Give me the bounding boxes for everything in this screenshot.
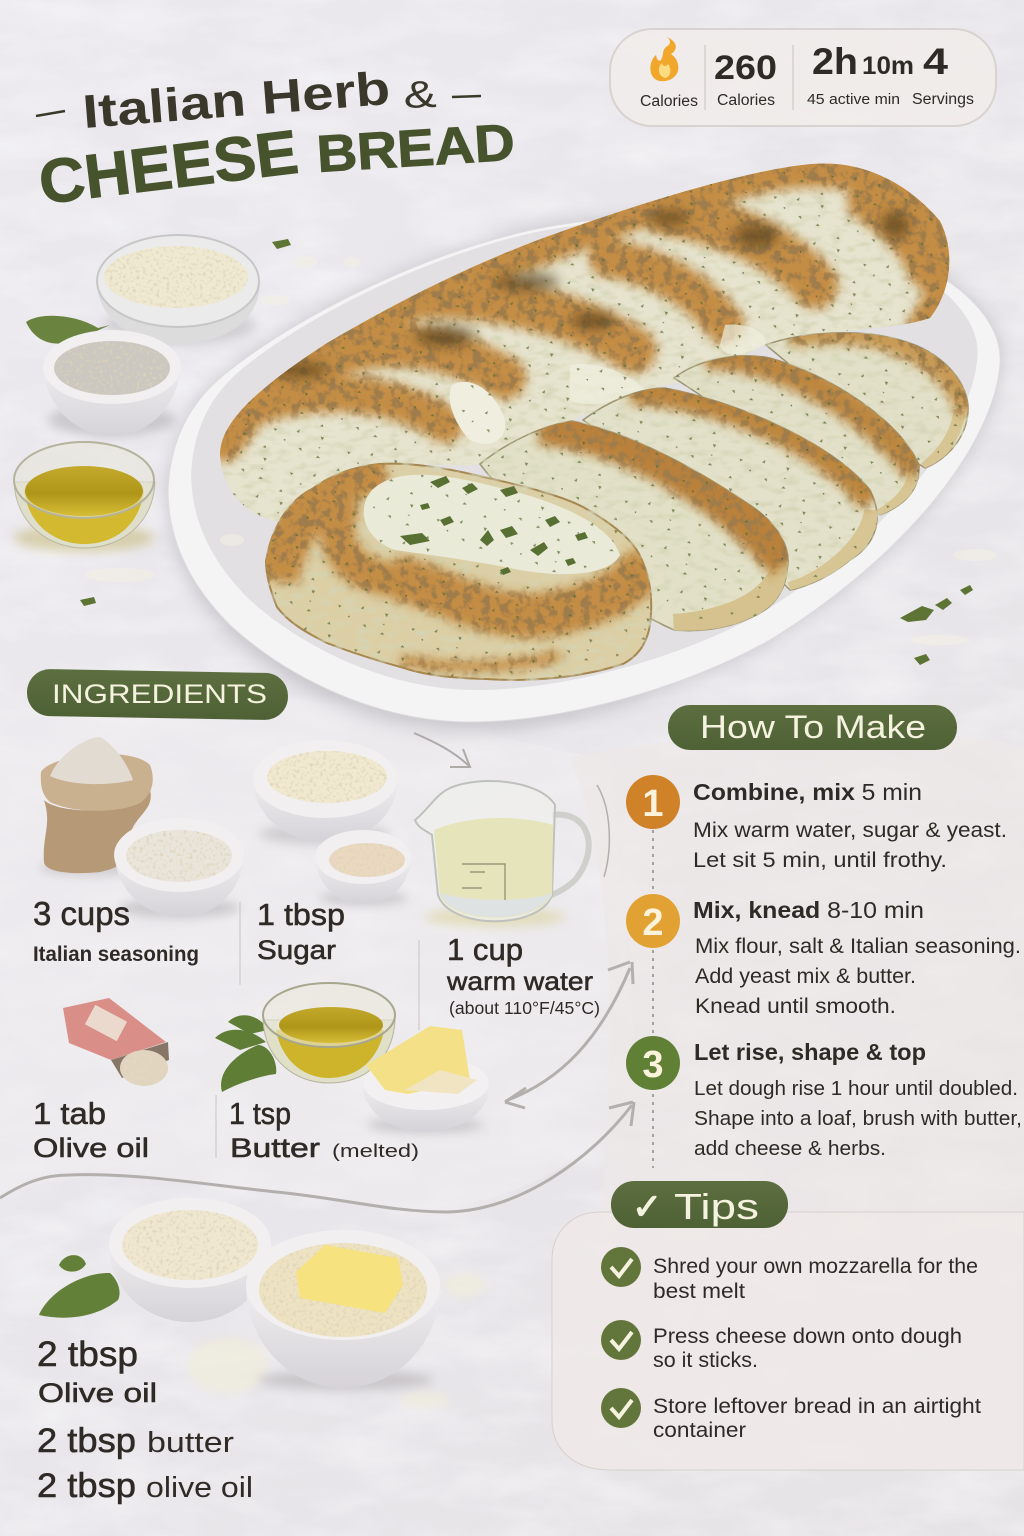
- small sugar bowl: [315, 830, 411, 905]
- tip 2: so it sticks.: [653, 1349, 758, 1372]
- step 2 body: Mix flour, salt & Italian seasoning.: [695, 935, 1021, 958]
- calories value: Calories: [717, 92, 775, 109]
- step 3: [626, 1036, 1022, 1160]
- swirl herbs: [400, 476, 588, 575]
- title line 1: Italian Herb: [81, 61, 392, 138]
- arrows: flow between sections: [0, 785, 634, 1212]
- bowl: mozzarella: [108, 1198, 272, 1322]
- tips heading: ✓: [632, 1186, 662, 1227]
- tip 3: Store leftover bread in an airtight: [653, 1395, 981, 1418]
- title line 1: &: [403, 74, 437, 117]
- panel: ingredients background: [0, 696, 640, 1208]
- tip 2: Press cheese down onto dough: [653, 1325, 962, 1348]
- title line 2: [35, 114, 516, 218]
- ingredient: olive oil bowl with basil: [215, 983, 395, 1092]
- name: Butter melted: Butter: [230, 1133, 320, 1163]
- name: Olive oil: Olive oil: [38, 1378, 157, 1408]
- step 1 body: Mix warm water, sugar & yeast.: [693, 819, 1007, 842]
- panel: stats: [610, 29, 996, 126]
- step 2 body: Knead until smooth.: [695, 995, 896, 1018]
- step 3 heading: Let rise, shape & top: [694, 1039, 926, 1065]
- bowl: olive oil: [14, 442, 155, 552]
- loaf herb flecks: [215, 160, 960, 530]
- tips heading: [611, 1181, 788, 1228]
- icon: basil: [39, 1255, 120, 1318]
- top left garnish bowls: [14, 235, 260, 552]
- step 1: [626, 775, 1007, 872]
- step number 2: [626, 894, 680, 948]
- time: 45 active min: [807, 91, 900, 108]
- title line 2: CHEESE: [35, 118, 302, 218]
- step number 1: 1: [642, 783, 664, 825]
- step number 1: [626, 775, 680, 829]
- step 3 body: Shape into a loaf, brush with butter,: [694, 1107, 1022, 1130]
- note: temperature: (about 110°F/45°C): [449, 998, 600, 1018]
- ingredient: measuring cup: [415, 781, 589, 927]
- quantity: 1 cup: 1 cup: [447, 932, 523, 967]
- bowl: seasoning: [43, 330, 181, 436]
- quantity: 1 tbsp: 1 tbsp: [257, 897, 345, 932]
- section heading: ingredients: INGREDIENTS: [52, 679, 267, 709]
- name: Olive oil: Olive oil: [33, 1133, 149, 1163]
- name: warm water: warm water: [446, 966, 593, 996]
- ingredient: bottom bowls: [39, 1198, 485, 1408]
- swirl crust ring: [275, 468, 650, 666]
- bread: slice 4: [764, 332, 969, 469]
- bread: back loaf: [215, 160, 960, 530]
- ingredient labels row 2: (melted): [332, 1141, 419, 1161]
- quantity: 2 tbsp: 2 tbsp: [37, 1335, 138, 1374]
- tip 1: best melt: [653, 1280, 745, 1303]
- calories value: 260: [714, 49, 777, 87]
- bread: slice 3: [670, 350, 925, 520]
- item: 2 tbsp butter: 2 tbsp: [37, 1422, 136, 1460]
- loaf dark toasted patches: [272, 210, 909, 378]
- tip 1: [601, 1247, 978, 1303]
- step 3 body: add cheese & herbs.: [694, 1137, 886, 1160]
- step number 2: 2: [642, 902, 664, 944]
- loaf crust: [224, 166, 952, 440]
- ingredient: flour sack and bowl: [39, 737, 244, 918]
- step 2 body: [695, 935, 1021, 1018]
- step 1 body: [693, 819, 1007, 872]
- panel: how to make background: [570, 731, 1024, 1240]
- step 3 body: Let dough rise 1 hour until doubled.: [694, 1077, 1018, 1100]
- servings: [912, 41, 974, 108]
- bread: swirl slice: [262, 460, 654, 682]
- time: [807, 41, 914, 108]
- quantity: 1 tsp: 1 tsp: [229, 1096, 291, 1131]
- servings: Servings: [912, 91, 974, 108]
- item: 2 tbsp olive oil: [37, 1467, 253, 1505]
- ingredient: cheese bowls: [253, 740, 411, 905]
- name: Sugar: Sugar: [257, 935, 336, 965]
- ingredient: seasoning box: [63, 998, 169, 1086]
- title line 1: [36, 61, 481, 138]
- section heading: how to make: How To Make: [700, 709, 926, 745]
- bowl: grated cheese: [97, 235, 260, 345]
- time: 10m: [862, 52, 914, 80]
- quantity: 3 cups: 3 cups: [33, 895, 130, 932]
- time: 2h: [812, 41, 858, 82]
- section heading: how to make: [668, 705, 957, 750]
- icon: basil leaf: [26, 316, 110, 344]
- calories label: Calories: [640, 93, 698, 110]
- plate: [168, 216, 1000, 732]
- scattered herbs and crumbs: [80, 239, 997, 665]
- flour mound: [50, 737, 133, 784]
- step 2: [626, 894, 1021, 1018]
- step 1 heading: Combine, mix 5 min: [693, 779, 922, 805]
- step 1 body: Let sit 5 min, until frothy.: [693, 849, 947, 872]
- calories value: [714, 49, 777, 109]
- bread: slice 1: [478, 418, 790, 633]
- item: 2 tbsp butter: [37, 1422, 234, 1460]
- section heading: ingredients: [27, 669, 288, 720]
- seasoning bowl: [114, 818, 244, 918]
- tip 3: container: [653, 1419, 746, 1442]
- step 2 body: Add yeast mix & butter.: [695, 965, 916, 988]
- flour sack: [44, 790, 151, 873]
- title: [35, 61, 516, 218]
- arrow: ingredients curve: [414, 733, 470, 767]
- title line 2: BREAD: [315, 114, 516, 184]
- basil: [215, 1015, 276, 1092]
- panel: tips: [552, 1181, 1024, 1470]
- swirl outer herb specks: [262, 460, 654, 682]
- step number 3: 3: [642, 1044, 664, 1086]
- bread: slice 2: [580, 380, 880, 595]
- item: 2 tbsp olive oil: olive oil: [146, 1472, 253, 1504]
- step 2 heading: Mix, knead 8-10 min: [693, 897, 924, 923]
- step number 3: [626, 1036, 680, 1090]
- crumbs: [188, 1273, 485, 1408]
- bowl: butter and cheese: [246, 1230, 441, 1390]
- tip 3: [601, 1388, 981, 1442]
- swirl centre: [364, 475, 620, 574]
- ingredient labels row 2: [33, 1095, 419, 1163]
- ingredient labels bottom: [37, 1335, 253, 1505]
- ingredient: butter bowl: [362, 1026, 490, 1133]
- quantity: 1 tab: 1 tab: [33, 1096, 106, 1131]
- ingredient labels row 1: [33, 895, 600, 1030]
- tips heading: Tips: [674, 1186, 759, 1227]
- servings: 4: [923, 41, 949, 82]
- item: 2 tbsp olive oil: 2 tbsp: [37, 1467, 136, 1505]
- dotted step connector: [652, 830, 654, 1168]
- step 3 body: [694, 1077, 1022, 1160]
- icon: flame: [650, 37, 678, 81]
- loaf pale melted cheese patches: [450, 325, 766, 444]
- tip 1: Shred your own mozzarella for the: [653, 1255, 978, 1278]
- item: 2 tbsp butter: butter: [147, 1427, 234, 1459]
- name: Italian seasoning: Italian seasoning: [33, 943, 199, 966]
- tip 2: [601, 1320, 962, 1372]
